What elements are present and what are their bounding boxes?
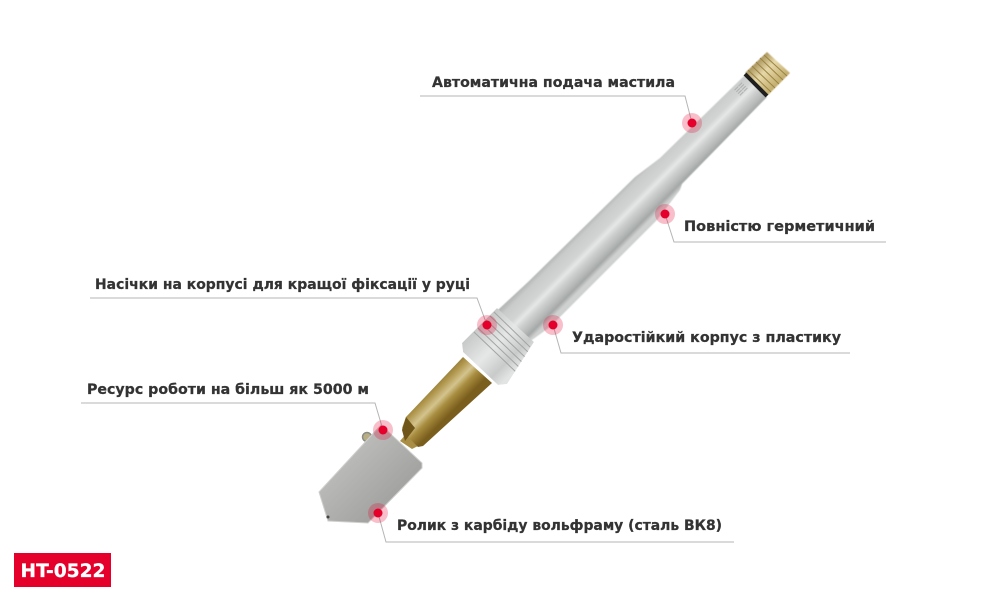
handle body (492, 75, 767, 345)
callout: tungsten carbide roller (368, 503, 734, 542)
callout: automatic oil feed (420, 75, 702, 133)
glass cutter tool (319, 52, 790, 523)
callout: automatic oil feed: Автоматична подача мастила (432, 75, 675, 91)
callout: impact resistant body (543, 315, 850, 353)
callout: grip notches (90, 277, 497, 335)
infographic: glass cutter with callouts (14, 52, 886, 587)
knurled brass cap (745, 52, 790, 95)
badge: article number (14, 553, 111, 587)
callout: tungsten carbide roller: Ролик з карбіду вольфраму (сталь ВК8) (397, 518, 722, 534)
callout: sealed: Повністю герметичний (684, 219, 875, 235)
brass barrel (402, 357, 492, 447)
black rubber ring (745, 74, 767, 96)
badge: article number: HT-0522 (20, 560, 106, 582)
callout: sealed (655, 204, 886, 242)
steel head plate (319, 425, 422, 523)
brass neck (400, 434, 418, 449)
callout: service life: Ресурс роботи на більш як 5000 м (87, 382, 369, 398)
callout: impact resistant body: Ударостійкий корпус з пластику (572, 330, 841, 346)
callout: grip notches: Насічки на корпусі для кращої фіксації у руці (95, 277, 470, 293)
callout: service life (81, 382, 393, 440)
threaded collar (462, 308, 534, 385)
